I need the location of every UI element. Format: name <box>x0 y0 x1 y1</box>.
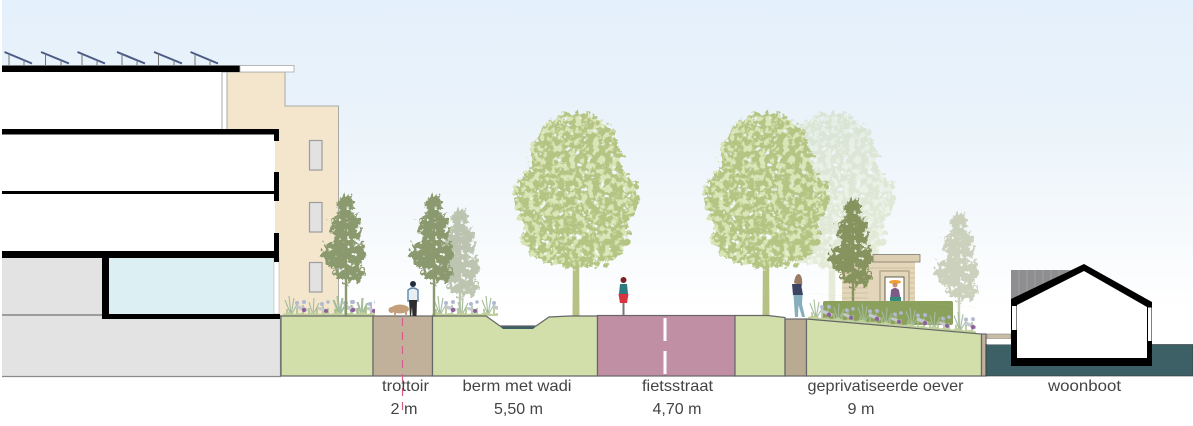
dashed section line <box>402 318 404 414</box>
jetty <box>987 334 1011 344</box>
label: trottoir: trottoir <box>382 378 430 395</box>
label: 2 m: 2 m <box>390 401 418 418</box>
ground level grey and blue room <box>2 258 102 315</box>
water <box>986 344 1193 376</box>
ground section <box>281 316 986 376</box>
building section <box>2 66 294 376</box>
verge <box>735 316 785 376</box>
interior floors <box>2 72 222 130</box>
houseboat <box>1011 264 1152 366</box>
label: 5,50 m: 5,50 m <box>494 401 543 418</box>
sidewalk <box>373 316 432 376</box>
wadi water <box>500 326 536 329</box>
quay edge <box>982 334 986 376</box>
label: geprivatiseerde oever: geprivatiseerde oever <box>808 378 964 395</box>
gardener in window <box>885 277 904 302</box>
road dashes <box>664 318 666 374</box>
green verge <box>281 316 373 376</box>
small tree in garden <box>829 199 873 327</box>
bike street <box>598 316 735 376</box>
woman walking <box>792 274 805 317</box>
private bank slope <box>806 319 982 376</box>
label: berm met wadi: berm met wadi <box>462 378 572 395</box>
label: woonboot: woonboot <box>1047 378 1122 395</box>
planting strips <box>283 290 498 316</box>
foundation <box>2 315 281 376</box>
hedge <box>823 301 953 325</box>
path on embankment <box>785 319 806 376</box>
dog <box>388 304 409 316</box>
small street trees <box>322 195 454 323</box>
roof overhang <box>240 66 294 72</box>
label: 9 m: 9 m <box>848 401 874 418</box>
tall street trees <box>513 112 829 320</box>
black structure <box>2 66 280 319</box>
label: 4,70 m: 4,70 m <box>652 401 702 418</box>
berm with wadi <box>432 316 598 376</box>
pale background trees <box>436 112 979 341</box>
facade windows <box>310 140 322 292</box>
solar panels <box>4 52 218 66</box>
label: fietsstraat: fietsstraat <box>642 378 714 395</box>
cyclist <box>618 277 628 315</box>
garden shed <box>842 254 920 302</box>
person with backpack <box>408 281 418 316</box>
facade of building <box>227 72 338 316</box>
garden flowers on slope <box>808 293 976 333</box>
